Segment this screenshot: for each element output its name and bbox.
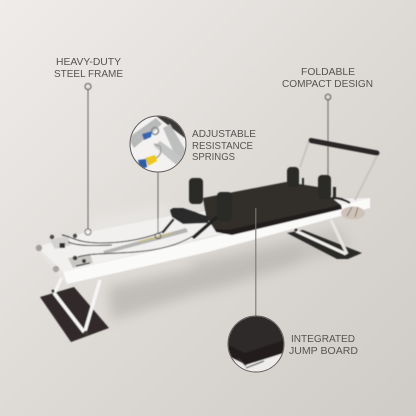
label: foldable compact design: COMPACT DESIGN bbox=[282, 78, 373, 90]
label: adjustable resistance springs: RESISTANCE bbox=[192, 140, 253, 152]
carriage ropes bbox=[62, 230, 193, 257]
front frame hardware bbox=[36, 234, 93, 272]
line: foldable bbox=[325, 94, 331, 176]
shoulder posts bbox=[189, 167, 336, 221]
label: foldable compact design: FOLDABLE bbox=[301, 66, 355, 78]
label: integrated jump board bbox=[289, 333, 358, 357]
right floor mat bbox=[287, 230, 362, 259]
rear frame hardware bbox=[332, 198, 365, 220]
label: adjustable resistance springs: SPRINGS bbox=[192, 151, 235, 163]
label: heavy-duty steel frame: HEAVY-DUTY bbox=[56, 56, 121, 68]
label: adjustable resistance springs: ADJUSTABLE bbox=[192, 128, 256, 140]
straps bbox=[163, 217, 217, 237]
line: steel frame bbox=[85, 84, 91, 235]
label: integrated jump board: JUMP BOARD bbox=[289, 345, 358, 357]
label: foldable compact design bbox=[282, 66, 373, 90]
black platform bbox=[203, 182, 342, 235]
line: springs bbox=[155, 172, 161, 239]
detail circle: jump board bbox=[228, 316, 284, 374]
right folding legs bbox=[294, 220, 347, 254]
pilates reformer bbox=[36, 84, 378, 342]
platform edge bbox=[216, 205, 342, 235]
resistance springs bbox=[103, 228, 188, 254]
detail circle: springs bbox=[128, 115, 190, 172]
foldable bar bbox=[300, 140, 378, 200]
floor shadows bbox=[90, 205, 350, 320]
shoulder pad bbox=[170, 208, 210, 224]
label: heavy-duty steel frame bbox=[54, 56, 123, 80]
label: integrated jump board: INTEGRATED bbox=[291, 333, 355, 345]
line: jump board bbox=[255, 208, 257, 316]
steel frame bbox=[37, 198, 370, 284]
left folding legs bbox=[52, 277, 100, 335]
label: heavy-duty steel frame: STEEL FRAME bbox=[54, 68, 123, 80]
left floor mat bbox=[40, 287, 109, 342]
label: adjustable resistance springs bbox=[192, 128, 256, 163]
